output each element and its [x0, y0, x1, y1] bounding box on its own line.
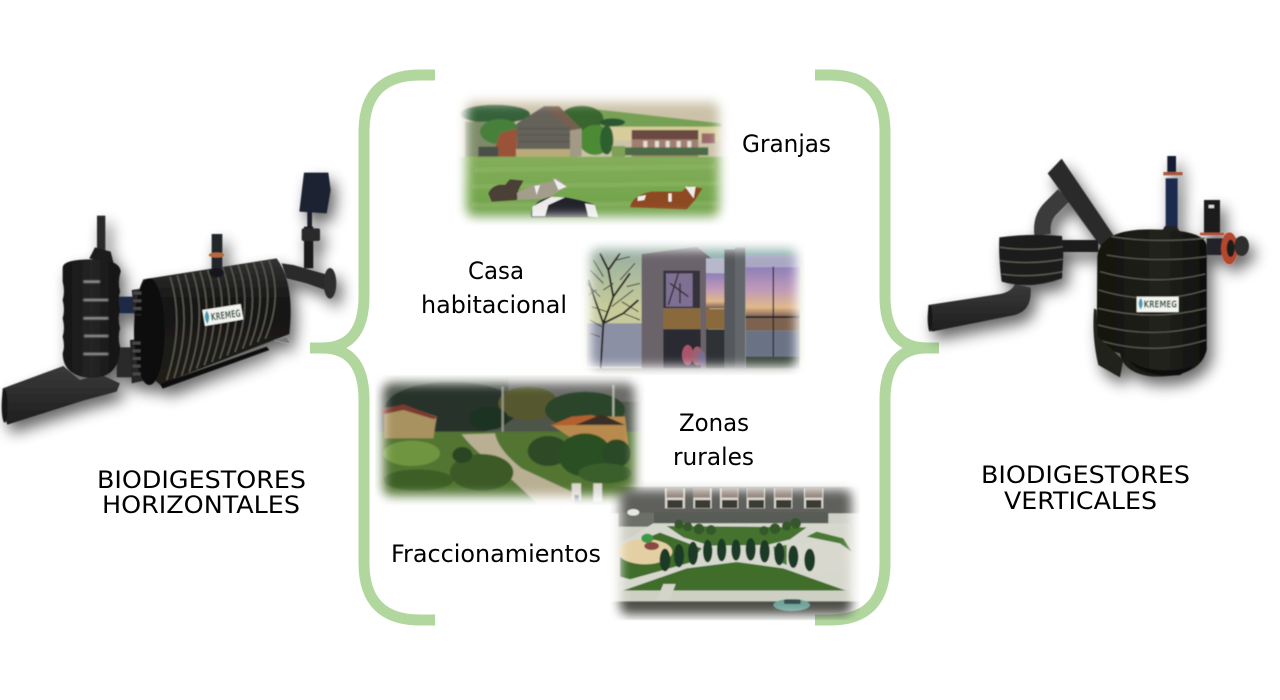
text: Casa habitacional: Casa	[468, 257, 524, 285]
photo: modern house	[580, 240, 805, 375]
KREMEG label: KREMEG	[210, 309, 241, 324]
KREMEG label	[1137, 297, 1179, 312]
photo: housing development park	[610, 480, 860, 620]
connector pipe	[1060, 240, 1098, 252]
right bracket	[815, 75, 939, 620]
main vertical tank	[1093, 229, 1207, 377]
red flange outlet	[1200, 232, 1249, 264]
KREMEG label	[202, 304, 243, 326]
cows	[488, 177, 702, 217]
small ribbed tank	[999, 235, 1063, 285]
inlet pipe	[2, 366, 120, 425]
large horizontal cylinder	[134, 258, 291, 389]
top vent with orange ring	[209, 234, 225, 277]
text: Zonas rurales	[673, 409, 754, 471]
caption: biodigestores horizontales: BIODIGESTORES	[97, 466, 306, 494]
short vent	[1204, 200, 1220, 233]
left bracket	[310, 75, 435, 620]
connecting pipes	[117, 288, 153, 383]
horizontal biodigester image	[2, 173, 336, 425]
small vertical tank	[63, 216, 121, 378]
caption: biodigestores horizontales: HORIZONTALES	[102, 491, 300, 519]
right outlet pipe and valve	[282, 173, 336, 299]
text: Casa habitacional	[421, 257, 567, 319]
Y branch pipe	[1042, 195, 1064, 235]
tall blue vent	[1162, 156, 1183, 232]
text: Granjas: Granjas	[742, 130, 831, 158]
text: Zonas rurales: rurales	[673, 443, 754, 471]
caption: biodigestores horizontales	[97, 466, 306, 519]
photo: farm with cows	[455, 90, 730, 225]
text: Casa habitacional: habitacional	[421, 291, 567, 319]
lower left elbow pipe	[928, 284, 1031, 332]
caption: biodigestores verticales	[981, 461, 1190, 515]
diagonal pipe	[1048, 159, 1113, 257]
flange bolts	[125, 292, 149, 378]
photo: rural road	[375, 375, 645, 505]
text: Zonas rurales: Zonas	[679, 409, 749, 437]
text: Fraccionamientos: Fraccionamientos	[391, 540, 601, 568]
vertical biodigester image	[928, 156, 1249, 377]
KREMEG label: KREMEG	[1144, 300, 1177, 311]
caption: biodigestores verticales: BIODIGESTORES	[981, 461, 1190, 489]
caption: biodigestores verticales: VERTICALES	[1004, 487, 1157, 515]
